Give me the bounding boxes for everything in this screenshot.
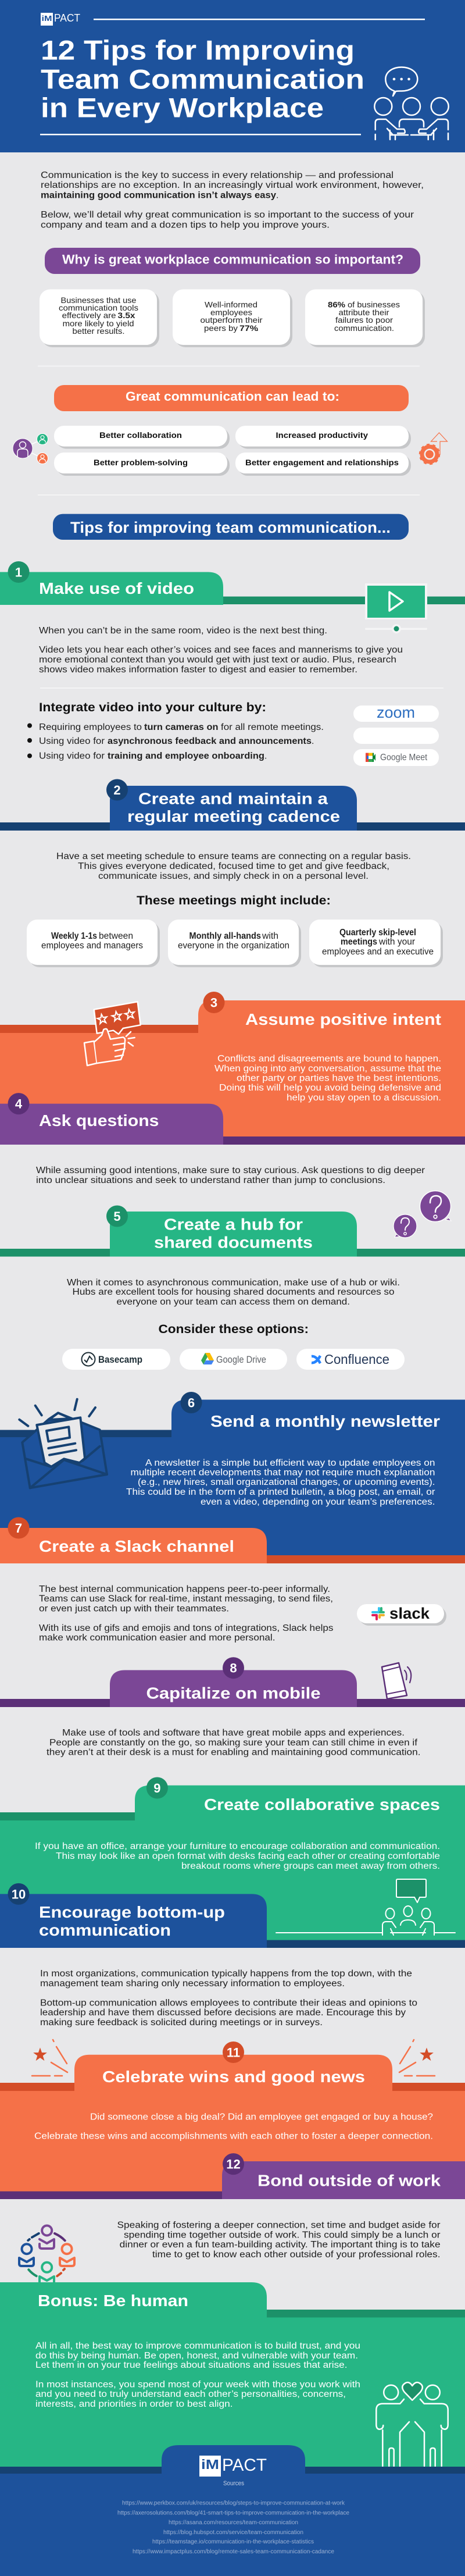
- number badge 7: [8, 1517, 29, 1539]
- tip 11 panel: [0, 2041, 465, 2192]
- stat card 1: better results.: [72, 326, 124, 336]
- number badge 9: [146, 1777, 168, 1798]
- subheading: meetings: These meetings might include:: [137, 894, 331, 907]
- stat card 1: Businesses that use: [60, 295, 137, 305]
- pill: increased productivity: [235, 426, 411, 449]
- sources: Sources: [223, 2480, 244, 2487]
- logo pill: Confluence: Confluence: [324, 1352, 389, 1367]
- bullet list: for all remote meetings.: [221, 722, 324, 732]
- sources: https://asana.com/resources/team-communication: [169, 2520, 298, 2526]
- bonus text: do this by being human. Be open, honest, and vulnerable with your team.: [35, 2351, 358, 2361]
- stat card 2: outperform their: [200, 315, 263, 325]
- logo pill: Google Drive: Google Drive: [216, 1354, 266, 1365]
- pill: better collaboration: [54, 426, 230, 449]
- number badge 12: 12: [226, 2157, 241, 2172]
- tip 3 panel: [0, 992, 465, 1138]
- tip 10 text: Bottom-up communication allows employees to contribute their ideas and opinions to: [40, 1998, 417, 2008]
- tip 3 text: [214, 1054, 441, 1103]
- tip 3 panel: Assume positive intent: [245, 1010, 441, 1028]
- stat card 2: peers by: [204, 323, 238, 333]
- bullet list: .: [312, 736, 314, 746]
- number badge 1: 1: [15, 565, 22, 579]
- icon: circle of people: [19, 2225, 74, 2282]
- tip 11 panel: Celebrate wins and good news: [102, 2068, 365, 2086]
- tip 6 panel: Send a monthly newsletter: [210, 1412, 440, 1430]
- tip 7 banner: [0, 1517, 465, 1563]
- tip 3 text: help you stay open to a discussion.: [287, 1093, 441, 1103]
- sources: https://teamstage.io/communication-in-the-workplace-statistics: [152, 2539, 314, 2545]
- meeting card: monthly: Monthly all-hands: [189, 931, 261, 941]
- tip 8 banner: Capitalize on mobile: [146, 1684, 321, 1702]
- tip 2 banner: Create and maintain a: [138, 790, 328, 807]
- icon: group discussion: [276, 1879, 455, 1935]
- tip 11 text: Did someone close a big deal? Did an employee get engaged or buy a house?: [90, 2112, 433, 2122]
- intro text: Communication is the key to success in every relationship — and professional: [41, 170, 394, 180]
- tip 12 text: spending time together outside of work. This could simply be a lunch or: [124, 2230, 441, 2240]
- bonus text: [35, 2341, 360, 2409]
- number badge 6: [180, 1392, 202, 1413]
- pill: better engagement: [235, 453, 411, 476]
- tip 2 banner: regular meeting cadence: [127, 807, 340, 825]
- bonus text: In most instances, you spend most of your week with those you work with: [35, 2380, 360, 2389]
- intro text: .: [276, 191, 278, 201]
- bullet list: Using video for: [39, 751, 105, 761]
- tip 7 text: or even just catch up with their teammates.: [39, 1604, 229, 1613]
- icon: two people and heart: [376, 2382, 448, 2466]
- icon: team meeting with speech bubble: [374, 67, 449, 140]
- stat card 2: employees: [210, 308, 252, 317]
- stat card 3: of businesses: [348, 300, 400, 309]
- tip 5 text: everyone on your team can access them on demand.: [116, 1297, 350, 1307]
- tip 2 text: [56, 851, 411, 881]
- number badge 6: 6: [188, 1396, 195, 1410]
- bonus text: and you need to truly understand each other’s personalities, concerns,: [35, 2389, 346, 2399]
- tip 7 text: With its use of gifs and emojis and tons of integrations, Slack helps: [39, 1623, 334, 1633]
- tip 12 text: time to get to know each other outside of your professional roles.: [152, 2250, 441, 2260]
- bonus text: interests, and priorities in order to best align.: [35, 2399, 233, 2409]
- tip 9 panel: [0, 1777, 465, 1941]
- number badge 7: 7: [15, 1521, 22, 1535]
- number badge 1: [8, 561, 29, 583]
- stat card 3: communication.: [334, 323, 394, 333]
- meeting card: monthly: [168, 920, 301, 967]
- intro text: relationships are no exception. In an increasingly virtual work environment, however,: [41, 180, 424, 190]
- heading pill: tips: Tips for improving team communication...: [70, 519, 391, 536]
- logo pill: Slack: [357, 1604, 446, 1626]
- heading pill: why is communication important: Why is great workplace communication so important?: [62, 252, 403, 266]
- number badge 10: 10: [12, 1887, 26, 1901]
- logo pill: zoom: [353, 704, 439, 722]
- footer logo: [199, 2456, 267, 2477]
- sources: https://www.impactplus.com/blog/remote-sales-team-communication-cadance: [133, 2549, 334, 2555]
- stat card 1: more likely to yield: [63, 319, 134, 328]
- tip 12 text: Speaking of fostering a deeper connection, set time and budget aside for: [117, 2221, 441, 2231]
- tip 1 text: shows video makes information faster to digest and easier to remember.: [39, 665, 357, 675]
- tip 12 banner: [0, 2153, 465, 2199]
- tip 5 text: [67, 1278, 400, 1307]
- tip 6 text: multiple recent developments that may not require much explanation: [130, 1468, 435, 1478]
- tip 1 text: [39, 626, 403, 675]
- title: [41, 35, 364, 123]
- header panel: [0, 0, 465, 152]
- tip 8 text: People are constantly on the go, so making sure your team can still chime in even if: [49, 1738, 418, 1748]
- logo pill: Google Meet: Google Meet: [380, 753, 427, 763]
- tip 10 banner: [0, 1883, 465, 1948]
- intro text: company and team and a dozen tips to help you improve yours.: [41, 220, 330, 230]
- tip 5 banner: [0, 1205, 465, 1256]
- icon: video player: [365, 583, 427, 633]
- bonus panel: Bonus: Be human: [38, 2292, 188, 2310]
- tip 8 text: Make use of tools and software that have great mobile apps and experiences.: [62, 1728, 405, 1738]
- stat card 3: 86%: [328, 300, 346, 309]
- meeting card: weekly: between: [99, 931, 133, 941]
- stat card 1: effectively are: [62, 311, 116, 320]
- logo pill: Google Drive: [180, 1349, 287, 1370]
- heading pill: great communication: [54, 385, 409, 411]
- meeting card: quarterly: meetings: [341, 937, 377, 947]
- bullet list: Requiring employees to: [39, 722, 142, 732]
- pill: better problem-solving: [54, 453, 230, 476]
- icon: gear and up arrow: [420, 433, 448, 464]
- number badge 10: [8, 1883, 29, 1905]
- meeting card: quarterly: employees and an executive: [322, 947, 434, 957]
- tip 8 text: [46, 1728, 421, 1758]
- footer logo: iM: [201, 2457, 219, 2472]
- logo pill: Google Meet: [353, 749, 439, 766]
- tip 10 banner: Encourage bottom-up: [39, 1903, 225, 1921]
- tip 6 panel: [0, 1392, 465, 1556]
- icon: left celebration sparks: [32, 2040, 67, 2076]
- tip 4 text: While assuming good intentions, make sure to stay curious. Ask questions to dig deeper: [36, 1166, 425, 1175]
- number badge 2: 2: [113, 783, 121, 797]
- pill: better problem-solving: Better problem-solving: [94, 458, 188, 467]
- pill: better collaboration: Better collaboration: [99, 430, 182, 440]
- meeting card: weekly: Weekly 1-1s: [51, 931, 97, 941]
- logo pill: Slack: slack: [389, 1605, 430, 1622]
- tip 10 text: management team sharing only necessary information to employees.: [40, 1979, 345, 1989]
- stat card 3: attribute their: [338, 308, 389, 317]
- subheading: integrate video: Integrate video into your culture by:: [39, 701, 266, 714]
- logo pill: zoom: zoom: [377, 704, 415, 721]
- number badge 4: 4: [15, 1097, 23, 1111]
- tip 6 text: A newsletter is a simple but efficient way to update employees on: [145, 1458, 435, 1468]
- tip 1 banner: [0, 561, 465, 605]
- logo pill: Basecamp: [62, 1349, 170, 1370]
- icon: thumbs up with star rating: [84, 1002, 141, 1066]
- title: 12 Tips for Improving: [41, 35, 355, 66]
- logo: IMPACT: [41, 12, 80, 26]
- tip 12 banner: Bond outside of work: [257, 2172, 441, 2190]
- footer logo: PACT: [222, 2456, 267, 2475]
- tip 9 panel: Create collaborative spaces: [204, 1795, 440, 1813]
- tip 10 text: making sure feedback is solicited during meetings or in surveys.: [40, 2018, 323, 2028]
- tip 4 banner: [0, 1093, 465, 1145]
- tip 7 text: [39, 1584, 334, 1643]
- benefit pills: [54, 426, 411, 476]
- number badge 5: [106, 1205, 128, 1227]
- tip 8 text: they aren’t at their desk is a must for enabling and maintaining good communication.: [46, 1748, 421, 1758]
- tip 5 text: Hubs are excellent tools for housing shared documents and resources so: [72, 1287, 394, 1297]
- pill: better engagement: Better engagement and relationships: [245, 458, 399, 467]
- sources: https://axerosolutions.com/blog/41-smart-tips-to-improve-communication-in-the-workplace: [117, 2510, 349, 2516]
- subheading: options: Consider these options:: [158, 1323, 309, 1336]
- tip 2 text: Have a set meeting schedule to ensure teams are connecting on a regular basis.: [56, 851, 411, 861]
- number badge 3: [203, 992, 224, 1013]
- heading pill: great communication: Great communication can lead to:: [126, 389, 339, 404]
- intro text: Below, we’ll detail why great communication is so important to the success of your: [41, 210, 414, 220]
- tip 7 text: Teams can use Slack for real-time, instant messaging, to send files,: [39, 1594, 333, 1604]
- logo pill: Confluence: [296, 1349, 405, 1370]
- tip 6 text: (e.g., new hires, small organizational changes, or upcoming events).: [138, 1477, 435, 1487]
- icon: question bubbles: [394, 1191, 451, 1238]
- tip 2 banner: [0, 779, 465, 831]
- stat card 1: 3.5x: [117, 311, 135, 320]
- tip 1 text: more emotional context than you would get with just text or audio. Plus, research: [39, 655, 396, 665]
- tip 9 text: [35, 1841, 440, 1871]
- number badge 11: [223, 2041, 244, 2063]
- bullet list: training and employee onboarding: [108, 751, 264, 761]
- tip 7 banner: Create a Slack channel: [39, 1537, 234, 1555]
- tip 10 text: In most organizations, communication typically happens from the top down, with the: [40, 1969, 412, 1979]
- meeting card: quarterly: with your: [378, 937, 415, 947]
- stat card 3: failures to poor: [335, 315, 393, 325]
- tip 9 text: This may look like an open format with desks facing each other or creating comfortable: [56, 1851, 440, 1861]
- tip 8 banner: [0, 1657, 465, 1707]
- bullet list: [27, 722, 324, 761]
- tip 2 text: communicate issues, and simply check in on a personal level.: [98, 871, 369, 881]
- number badge 5: 5: [113, 1209, 121, 1224]
- tip 3 text: Conflicts and disagreements are bound to happen.: [217, 1054, 441, 1064]
- pill: increased productivity: Increased productivity: [276, 430, 368, 440]
- tip 7 text: The best internal communication happens peer-to-peer informally.: [39, 1584, 330, 1594]
- tip 4 banner: Ask questions: [39, 1111, 159, 1130]
- tip 9 text: If you have an office, arrange your furniture to encourage collaboration and communication.: [35, 1841, 440, 1851]
- stat card 1: [40, 290, 159, 347]
- tip 10 text: leadership and have them discussed before decisions are made. Encourage this by: [40, 2008, 406, 2018]
- stat card 2: Well-informed: [205, 300, 257, 309]
- number badge 12: [223, 2153, 244, 2175]
- logo: IMPACT: iM: [42, 14, 52, 23]
- stat card 1: communication tools: [59, 303, 138, 312]
- meeting card: weekly: employees and managers: [41, 941, 143, 950]
- number badge 4: [8, 1093, 29, 1114]
- stat card 2: .: [256, 323, 259, 333]
- sources: [117, 2480, 349, 2555]
- tip 1 text: When you can’t be in the same room, video is the next best thing.: [39, 626, 327, 636]
- number badge 8: [223, 1657, 244, 1679]
- tip 11 text: Celebrate these wins and accomplishments with each other to foster a deeper connection.: [34, 2132, 433, 2142]
- meeting card: monthly: with: [262, 931, 278, 941]
- bullet list: Using video for: [39, 736, 105, 746]
- tip 2 text: This gives everyone dedicated, focused time to get and give feedback,: [78, 861, 389, 871]
- footer panel: [0, 2445, 465, 2576]
- tip 5 text: When it comes to asynchronous communication, make use of a hub or wiki.: [67, 1278, 400, 1288]
- tip 5 banner: shared documents: [154, 1234, 313, 1252]
- tip 10 text: [40, 1969, 417, 2028]
- sources: https://blog.hubspot.com/service/team-communication: [163, 2529, 303, 2536]
- meeting card: quarterly: Quarterly skip-level: [339, 928, 416, 938]
- number badge 11: 11: [227, 2045, 240, 2060]
- icon: right celebration sparks: [399, 2040, 435, 2076]
- bullet list: .: [264, 751, 267, 761]
- logo pill: Basecamp: Basecamp: [98, 1354, 142, 1365]
- bonus panel: [0, 2282, 465, 2467]
- icon: open envelope with newsletter: [19, 1399, 107, 1488]
- tip 12 text: dinner or even a fun team-building activity. The important thing is to take: [120, 2240, 441, 2250]
- title: Team Communication: [41, 63, 364, 94]
- bullet list: turn cameras on: [144, 722, 219, 732]
- tip 4 text: [36, 1166, 425, 1185]
- tip 3 text: other party or parties have the best intentions.: [237, 1074, 441, 1083]
- tip 3 text: Doing this will help you avoid being defensive and: [219, 1083, 441, 1093]
- number badge 3: 3: [210, 996, 217, 1010]
- stat card 2: 77%: [239, 323, 259, 333]
- tip 5 banner: Create a hub for: [164, 1216, 303, 1234]
- number badge 9: 9: [153, 1781, 161, 1795]
- meeting card: quarterly: [309, 920, 443, 967]
- tip 7 text: make work communication easier and more personal.: [39, 1633, 276, 1643]
- tip 1 banner: Make use of video: [39, 579, 194, 597]
- tip 10 banner: communication: [39, 1921, 171, 1939]
- intro text: [41, 170, 424, 230]
- tip 9 text: breakout rooms where groups can meet away from others.: [181, 1861, 440, 1871]
- bonus text: Let them in on your true feelings about situations and issues that arise.: [35, 2360, 348, 2370]
- tip 6 text: even a video, depending on your team’s preferences.: [201, 1497, 435, 1507]
- logo: IMPACT: PACT: [54, 12, 80, 24]
- tip 12 text: [117, 2221, 441, 2260]
- tip 11 text: [34, 2112, 433, 2142]
- heading pill: tips: [53, 514, 409, 540]
- stat card 3: [305, 290, 425, 347]
- meeting card: monthly: everyone in the organization: [178, 941, 289, 950]
- tip 6 text: This could be in the form of a printed bulletin, a blog post, an email, or: [126, 1487, 435, 1497]
- stat card 2: [173, 290, 292, 347]
- tip 3 text: When going into any conversation, assume that the: [214, 1064, 441, 1074]
- title: in Every Workplace: [41, 92, 324, 123]
- meeting card: weekly: [27, 920, 160, 967]
- number badge 2: [106, 779, 128, 800]
- tip 4 text: into unclear situations and seek to understand rather than jump to conclusions.: [36, 1175, 385, 1185]
- bonus text: All in all, the best way to improve communication is to build trust, and you: [35, 2341, 360, 2351]
- tip 6 text: [126, 1458, 435, 1507]
- number badge 8: 8: [230, 1661, 237, 1676]
- bullet list: asynchronous feedback and announcements: [108, 736, 312, 746]
- icon: mobile phone: [382, 1663, 411, 1699]
- intro text: maintaining good communication isn’t always easy: [41, 191, 276, 201]
- tip 1 text: Video lets you hear each other’s voices and see faces and mannerisms to give you: [39, 645, 403, 655]
- logo pill: blank: [353, 728, 439, 744]
- heading pill: why is communication important: [45, 248, 420, 274]
- icon: connected people: [13, 434, 48, 464]
- sources: https://www.perkbox.com/uk/resources/blog/steps-to-improve-communication-at-work: [122, 2500, 345, 2507]
